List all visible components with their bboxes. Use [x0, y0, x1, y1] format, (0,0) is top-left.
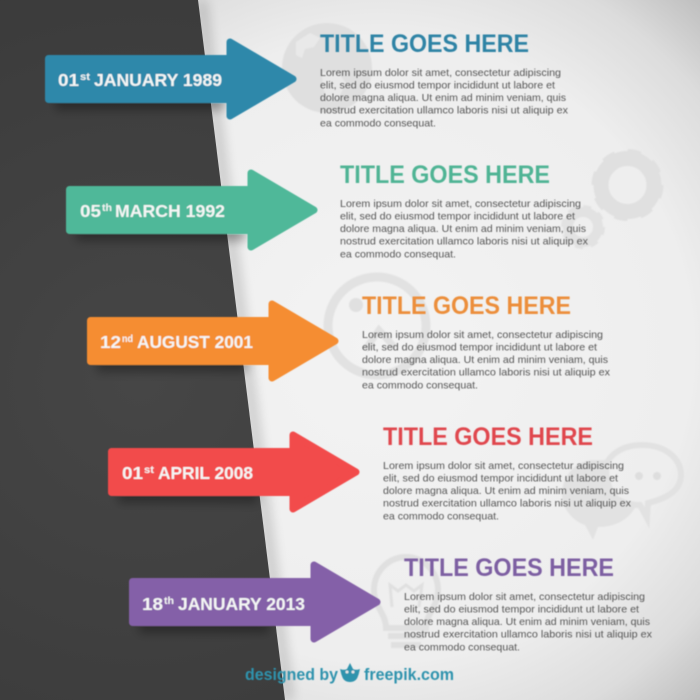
body 4: elit, sed do eiusmod tempor incididunt ut labore et [383, 474, 618, 484]
body 5: Lorem ipsum dolor sit amet, consectetur adipiscing [404, 592, 645, 603]
dark panel [0, 0, 285, 700]
arrow shadow [118, 483, 258, 503]
date 2: MARCH 1992 [115, 201, 225, 221]
arrow shadow [139, 613, 269, 633]
icon: search ring [328, 277, 426, 375]
date 2: th [102, 202, 112, 214]
date 4: APRIL 2008 [158, 463, 253, 483]
arrow: date 2 [70, 173, 314, 247]
arrow shadow [55, 90, 225, 110]
timeline item 3 [90, 292, 611, 391]
body 4 [383, 461, 632, 522]
body 4: nostrud exercitation ullamco laboris nisi ut aliquip ex [383, 499, 632, 510]
date 4: st [144, 464, 155, 476]
body 2: ea commodo consequat. [340, 249, 456, 260]
arrow shadow [97, 352, 247, 372]
body 1: ea commodo consequat. [320, 118, 436, 129]
timeline item 4 [112, 423, 632, 522]
date 1: JANUARY 1989 [94, 70, 222, 90]
body 3: nostrud exercitation ullamco laboris nisi ut aliquip ex [362, 368, 611, 379]
credit text left: designed by [245, 666, 339, 684]
body 1: elit, sed do eiusmod tempor incididunt ut labore et [320, 80, 555, 92]
body 4: Lorem ipsum dolor sit amet, consectetur adipiscing [383, 461, 624, 472]
icon: large gear [596, 153, 660, 217]
date 5: th [164, 595, 174, 607]
body 5: dolore magna aliqua. Ut enim ad minim veniam, quis [404, 617, 650, 628]
date 5: JANUARY 2013 [178, 594, 305, 614]
body 2: nostrud exercitation ullamco laboris nisi ut aliquip ex [340, 237, 589, 248]
date 3: 12 [100, 332, 121, 352]
body 5: elit, sed do eiusmod tempor incididunt ut labore et [404, 604, 639, 616]
body 2: elit, sed do eiusmod tempor incididunt ut labore et [340, 212, 575, 222]
body 1: Lorem ipsum dolor sit amet, consectetur adipiscing [320, 68, 561, 79]
arrow: date 5 [132, 565, 377, 639]
footer credit [245, 663, 454, 684]
credit text right: freepik.com [364, 666, 454, 684]
body 1: dolore magna aliqua. Ut enim ad minim veniam, quis [320, 93, 566, 104]
arrow: date 3 [90, 304, 335, 378]
title 3: TITLE GOES HERE [362, 292, 571, 320]
body 3: Lorem ipsum dolor sit amet, consectetur adipiscing [362, 330, 603, 341]
title 4: TITLE GOES HERE [383, 423, 593, 451]
title 1: TITLE GOES HERE [320, 30, 529, 58]
body 2: dolore magna aliqua. Ut enim ad minim veniam, quis [340, 224, 586, 235]
body 1 [320, 68, 569, 129]
date 4: 01 [122, 463, 143, 483]
body 5 [404, 592, 653, 653]
date 5: 18 [142, 594, 163, 614]
body 5: nostrud exercitation ullamco laboris nisi ut aliquip ex [404, 630, 653, 641]
icon: speech bubbles [562, 445, 681, 540]
body 4: ea commodo consequat. [383, 511, 499, 522]
date 1: st [80, 71, 91, 83]
edge shadow [198, 0, 292, 700]
body 5: ea commodo consequat. [404, 642, 520, 653]
date 3: nd [122, 333, 133, 345]
body 4: dolore magna aliqua. Ut enim ad minim veniam, quis [383, 486, 629, 497]
title 5: TITLE GOES HERE [404, 554, 614, 582]
timeline item 2 [70, 161, 589, 260]
date 1: 01 [58, 70, 79, 90]
timeline item 5 [132, 554, 653, 653]
icon: light bulb [374, 557, 438, 645]
arrow shadow [76, 221, 246, 241]
body 3: dolore magna aliqua. Ut enim ad minim veniam, quis [362, 355, 608, 366]
arrow: date 4 [112, 435, 356, 509]
body 3: elit, sed do eiusmod tempor incididunt ut labore et [362, 342, 597, 354]
body 3 [362, 330, 611, 391]
icon: freepik logo [340, 663, 360, 682]
body 2: Lorem ipsum dolor sit amet, consectetur adipiscing [340, 199, 581, 210]
timeline item 1 [48, 30, 569, 129]
body 1: nostrud exercitation ullamco laboris nisi ut aliquip ex [320, 106, 569, 117]
icon: small gear [564, 208, 602, 246]
date 3: AUGUST 2001 [137, 332, 253, 352]
icon: globe [282, 23, 372, 113]
arrow: date 1 [48, 42, 293, 116]
body 2 [340, 199, 589, 260]
title 2: TITLE GOES HERE [340, 161, 550, 189]
body 3: ea commodo consequat. [362, 380, 478, 391]
date 2: 05 [80, 201, 101, 221]
